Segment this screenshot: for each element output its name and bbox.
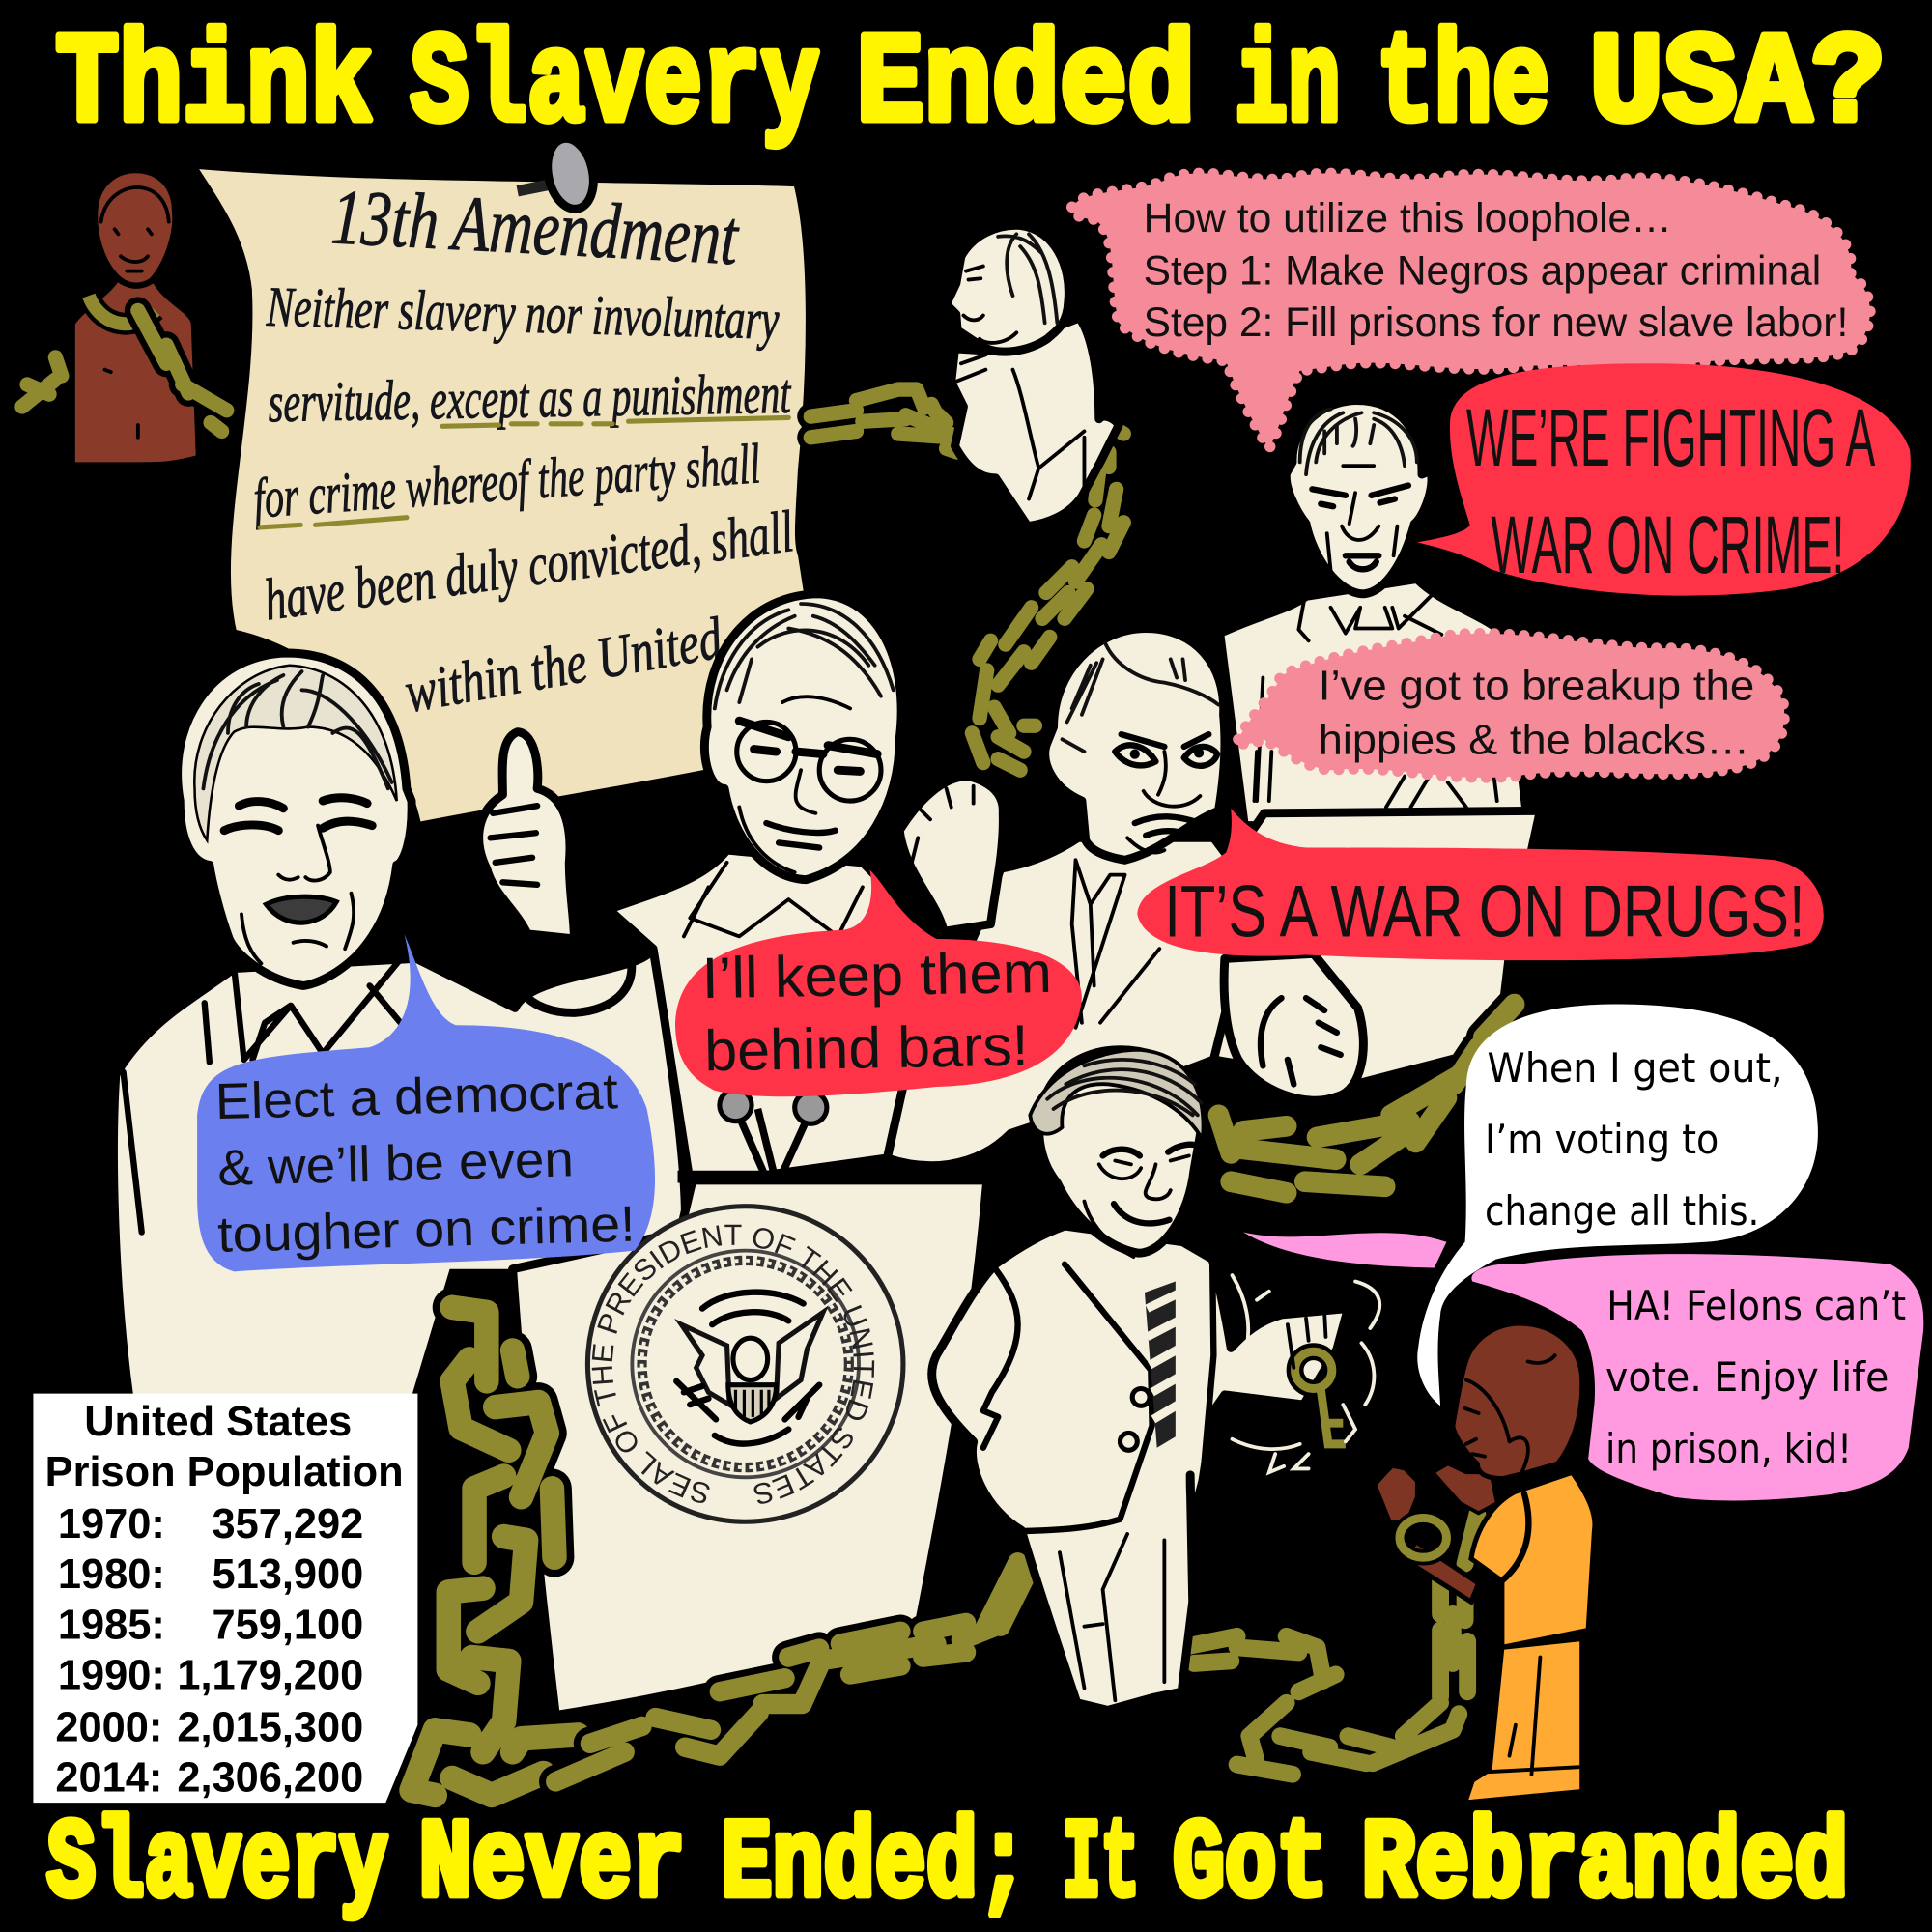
eagle: [676, 1293, 823, 1444]
figure: president at top right: [1220, 401, 1528, 826]
presidential podium: [508, 1171, 982, 1710]
row 1990: 1,179,200: [177, 1653, 363, 1699]
row 1980: 1980:: [58, 1551, 165, 1598]
speech bubble: hippies: [1238, 634, 1784, 778]
motion lines: [1233, 1275, 1379, 1472]
chain: scroll to thinking man and down: [810, 389, 1123, 770]
row 1970: [58, 1501, 363, 1548]
speech bubble: step plan: [1072, 173, 1870, 448]
panel: 13th Amendment scroll: [188, 134, 833, 828]
head: [704, 594, 901, 880]
bubble text: [701, 940, 1052, 1083]
title: in: [1235, 14, 1341, 158]
bottom title: Slavery: [46, 1804, 388, 1929]
hands: [1375, 1463, 1497, 1521]
table: prison population: United States: [84, 1399, 352, 1445]
head: [1453, 1323, 1582, 1479]
title: USA?: [1589, 14, 1886, 158]
head: [178, 653, 412, 985]
row 1990: [58, 1653, 363, 1699]
bubble text: I’m voting to: [1485, 1116, 1719, 1163]
highlighted loophole underlines: [260, 417, 788, 527]
chain: trump to prisoner: [1181, 1515, 1477, 1775]
scroll text: [251, 275, 797, 725]
row 2014: 2014:: [55, 1755, 162, 1802]
figure: thinking man profile: [947, 225, 1119, 526]
body: [887, 838, 1233, 1166]
keys in hand: [1288, 1314, 1346, 1444]
presidential seal: SEAL OF THE PRESIDENT OF THE UNITED STATES.: [591, 1225, 875, 1504]
scroll heading: 13th Amendment: [329, 172, 742, 281]
bubble text: vote. Enjoy life: [1605, 1353, 1889, 1401]
body: [114, 949, 685, 1410]
bubble text: [1144, 195, 1848, 346]
speech bubble: keep them behind bars: [675, 870, 1082, 1096]
row 1985: [58, 1602, 363, 1648]
title: the: [1377, 14, 1550, 158]
speech bubble: war on crime: [1417, 363, 1911, 596]
title: Think: [55, 14, 373, 158]
microphones: [720, 1090, 827, 1173]
podium behind Nixon: [1213, 810, 1540, 1084]
head: [1039, 1050, 1203, 1253]
row 2014: [55, 1755, 363, 1802]
title: [55, 14, 1886, 158]
scroll text: for crime whereof the party shall: [251, 432, 762, 530]
scroll text: servitude, except as a punishment: [268, 362, 792, 434]
figure: president holding keys: [932, 1050, 1379, 1710]
bottom title: Ended;: [721, 1804, 1029, 1929]
striped tie: [1145, 1282, 1178, 1448]
body: [609, 850, 912, 1182]
bottom title: Never: [419, 1804, 685, 1929]
row 2014: 2,306,200: [177, 1755, 363, 1802]
chain: large chain at podium: [412, 1307, 578, 1795]
presidential seal: [585, 1204, 906, 1524]
bubble text: Step 1: Make Negros appear criminal: [1144, 248, 1821, 295]
figure: president with clenched fist: [887, 629, 1363, 1166]
head: [1045, 629, 1225, 860]
row 2000: 2,015,300: [177, 1704, 363, 1750]
scroll text: within the United: [400, 605, 727, 725]
chain: long bottom chain: [555, 1562, 1026, 1781]
row 1980: [58, 1551, 363, 1598]
bubble text: tougher on crime!: [217, 1197, 636, 1264]
table: prison population: Prison Population: [45, 1449, 404, 1495]
speech bubble: elect a democrat: [197, 934, 655, 1271]
bubble text: Step 2: Fill prisons for new slave labor!: [1144, 299, 1848, 346]
row 1990: 1990:: [58, 1653, 165, 1699]
bubble text: & we’ll be even: [217, 1131, 575, 1197]
arm: [1405, 1542, 1479, 1602]
bubble text: change all this.: [1485, 1187, 1759, 1235]
figure: president with glasses and raised thumb: [609, 594, 912, 1182]
bubble text: [1485, 1044, 1783, 1235]
wrist cuff: [1400, 1518, 1446, 1557]
body: [932, 1226, 1348, 1710]
scroll paper: [188, 162, 833, 828]
black shadow behind chain: [412, 1269, 560, 1780]
row 2000: 2000:: [55, 1704, 162, 1750]
mics and chain sketches on far podium: [1254, 752, 1466, 807]
bubble text: behind bars!: [704, 1013, 1029, 1083]
bubble text: When I get out,: [1488, 1044, 1783, 1092]
hand: gripping chain: [1224, 953, 1363, 1100]
row 1980: 513,900: [213, 1551, 363, 1598]
chain: right loop: [1218, 1005, 1515, 1193]
pants: [1465, 1638, 1582, 1803]
bubble text: hippies & the blacks…: [1319, 718, 1749, 764]
bottom title: It: [1062, 1804, 1140, 1929]
hand: thumbs up: [479, 732, 574, 939]
bottom title: Got: [1173, 1804, 1328, 1929]
title: Ended: [856, 14, 1195, 158]
bubble text: How to utilize this loophole…: [1144, 195, 1672, 242]
row 1970: 357,292: [213, 1501, 363, 1548]
bubble text: I’ll keep them: [701, 940, 1052, 1010]
table: prison population: [33, 1394, 417, 1803]
neck collar: [89, 296, 156, 324]
nail: [518, 134, 600, 213]
bubble text: in prison, kid!: [1605, 1425, 1852, 1472]
row 1970: 1970:: [58, 1501, 165, 1548]
bubble text: Elect a democrat: [214, 1064, 619, 1130]
row 2000: [55, 1704, 363, 1750]
speech bubble: prisoner hope: [1417, 1005, 1818, 1406]
row 1985: 1985:: [58, 1602, 165, 1648]
figure: enslaved child in chains: [22, 170, 227, 466]
scroll text: Neither slavery nor involuntary: [265, 275, 781, 352]
figure: president with white hair: [114, 653, 685, 1410]
speech bubble: cruel reply: [1243, 1233, 1923, 1500]
bubble text: I’ve got to breakup the: [1319, 663, 1754, 709]
bottom title: [46, 1804, 1848, 1929]
figure: child prisoner in orange: [1375, 1323, 1595, 1803]
bubble text: [214, 1064, 636, 1264]
speech bubble: war on drugs: [1137, 809, 1824, 960]
bubble text: [1466, 392, 1875, 590]
bubble text: [1605, 1282, 1906, 1472]
scroll text: have been duly convicted, shall: [261, 498, 797, 633]
bubble text: [1319, 663, 1754, 764]
bubble text: HA! Felons can’t: [1606, 1282, 1906, 1329]
row 1985: 759,100: [213, 1602, 363, 1648]
title: Slavery: [411, 14, 819, 158]
shirt: [1471, 1472, 1595, 1647]
chain: [22, 310, 227, 431]
hand: fist: [899, 777, 1003, 931]
